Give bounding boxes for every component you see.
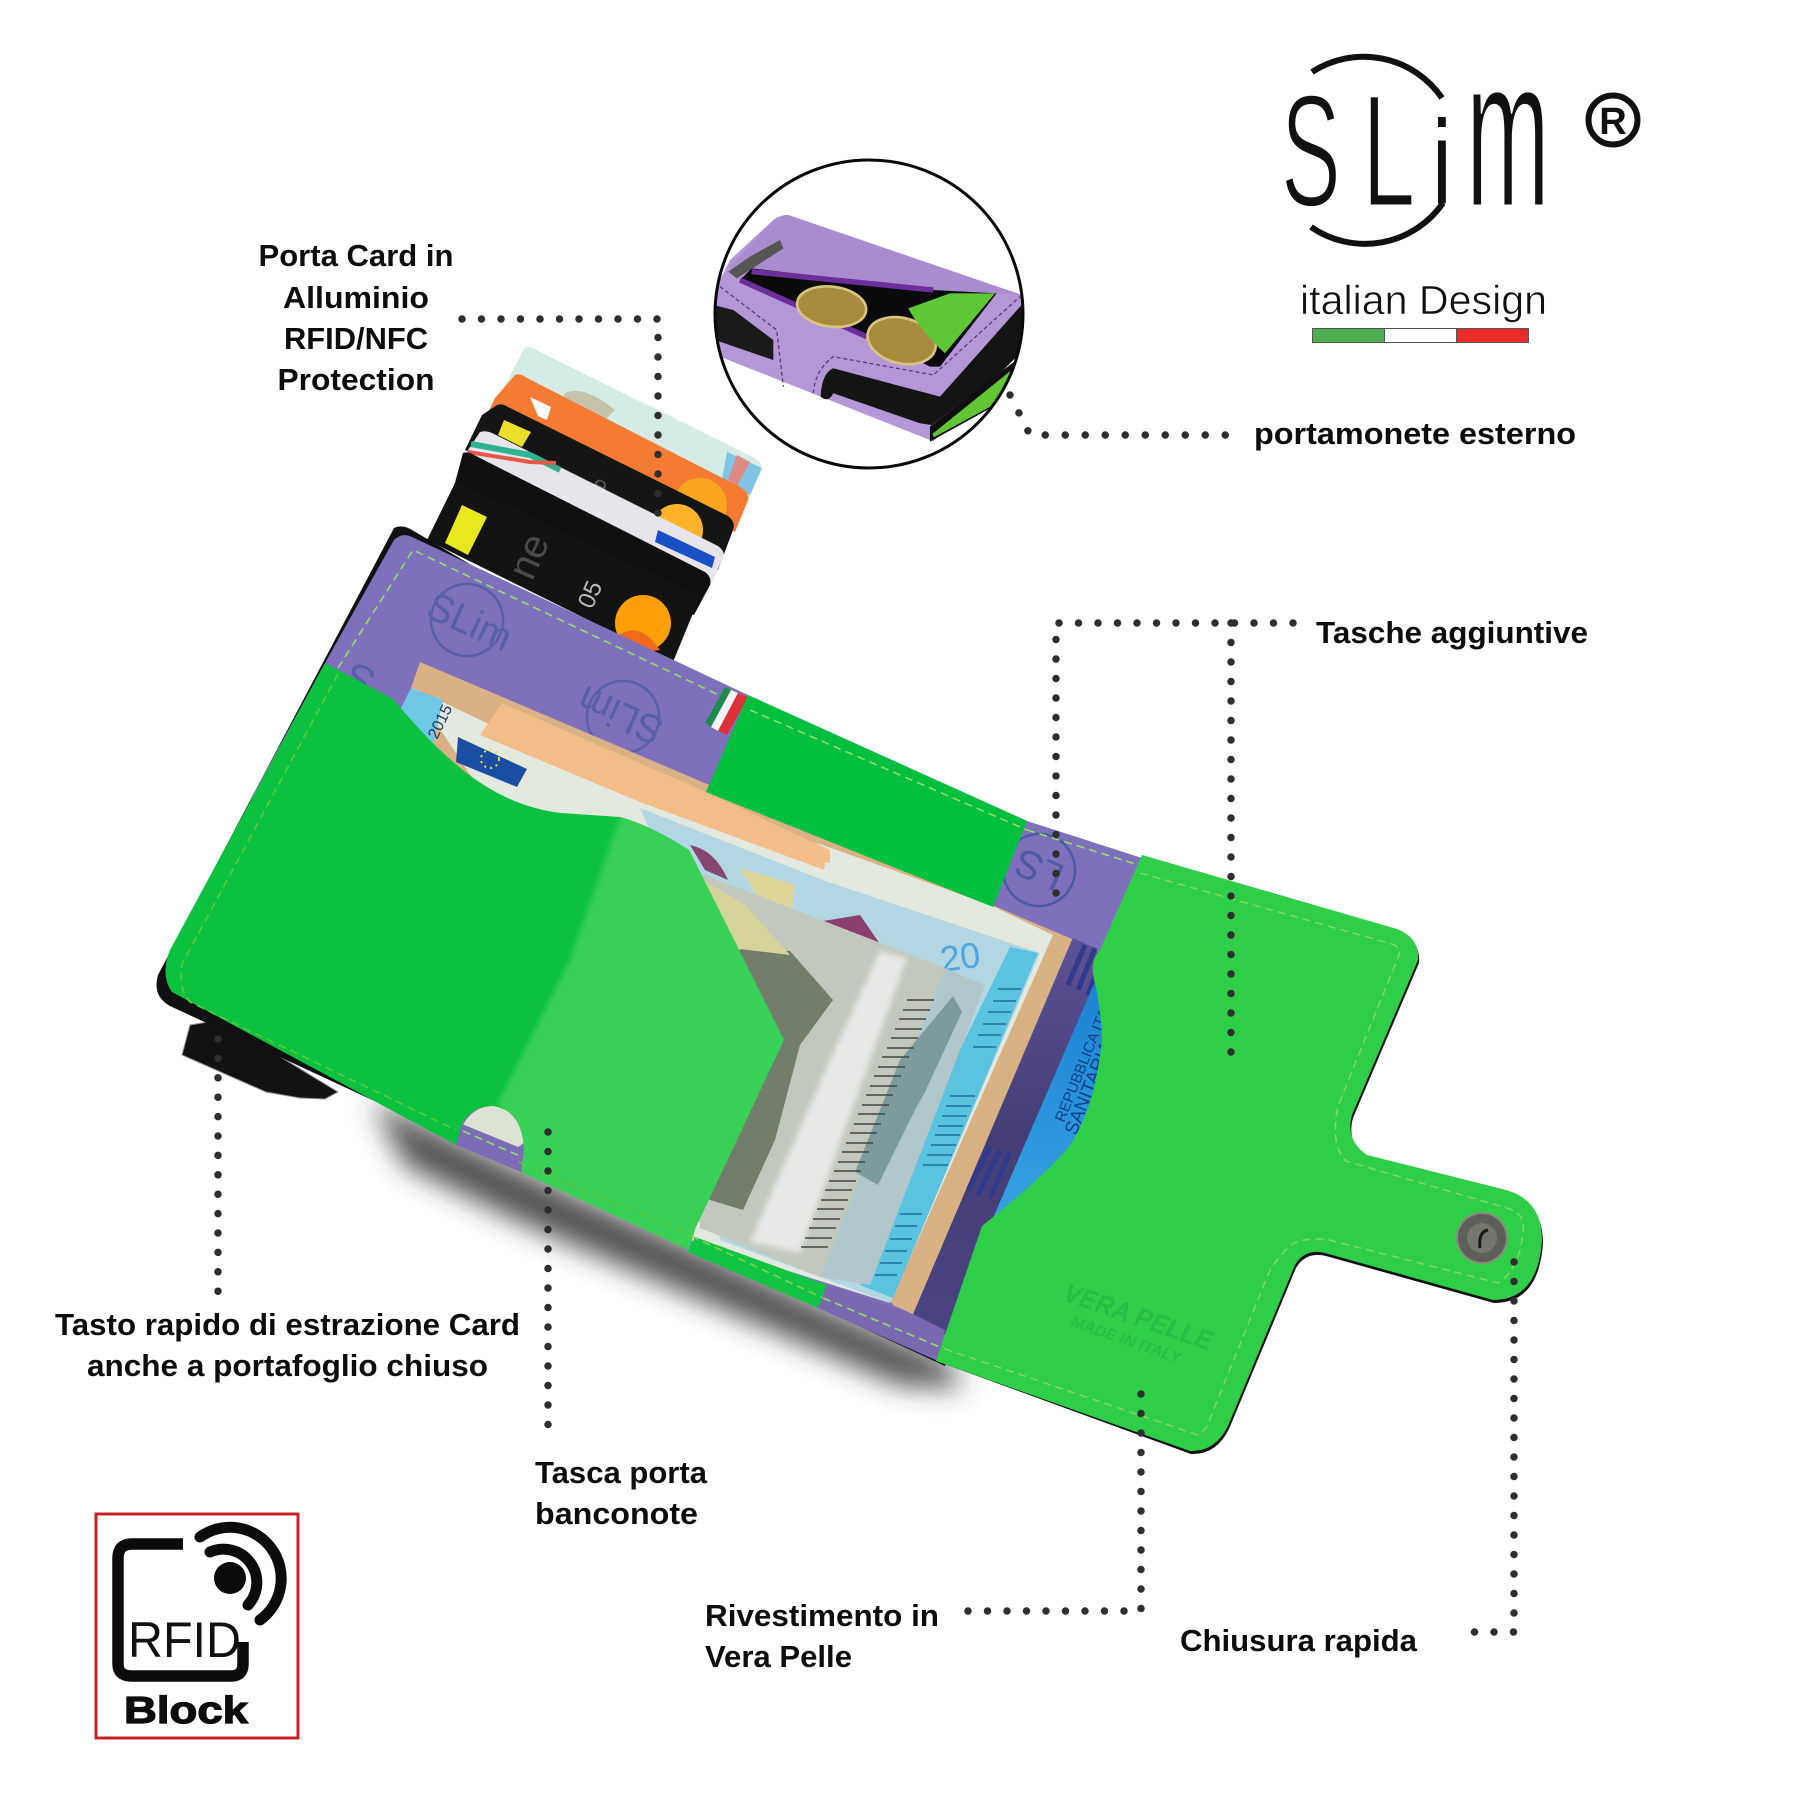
EU flag (456, 737, 527, 787)
label: tasto rapido (55, 1307, 520, 1383)
grey note (680, 874, 945, 1277)
tan lining edge front (893, 935, 1072, 1314)
health card peeking, blue: SANITARIA (1061, 1038, 1118, 1138)
logo wordmark: i (1432, 97, 1452, 229)
health card peeking, blue (993, 900, 1170, 1260)
embossed Vera Pelle mark: VERA PELLE (1060, 1277, 1217, 1356)
cyan right stripe (860, 947, 1038, 1298)
lining stamp bars (968, 945, 1105, 1198)
card: black two (445, 452, 710, 615)
magenta window (823, 915, 880, 944)
icon: signal dot (214, 1562, 246, 1594)
lining stamp top-left: SLim (420, 584, 518, 660)
wallet close-up (710, 215, 1027, 442)
magenta arch (690, 845, 728, 880)
label: tasto rapido: anche a portafoglio chiuso (87, 1348, 488, 1383)
tagline: italian Design (1300, 277, 1547, 323)
pale cream top strip (823, 862, 1053, 953)
left green banknote pocket (Tasca porta banconote) (165, 663, 800, 1260)
pocket stitching (181, 674, 691, 1236)
light blue note (640, 808, 1040, 1303)
banknotes (395, 662, 1072, 1314)
leader: tasto rapido (214, 1039, 222, 1293)
bottom purple strip (818, 1285, 945, 1361)
leader: rivestimento (964, 1394, 1141, 1611)
drop shadow under wallet (372, 1100, 965, 1388)
card: ID light (495, 347, 762, 500)
leader: chiusura rapida (1457, 1262, 1514, 1632)
tan note edge (400, 662, 1072, 1314)
health card peeking, blue: REPUBBLICA ITALIANA (1052, 966, 1129, 1124)
label: tasca porta banconote (535, 1455, 708, 1531)
orange note strip (480, 703, 830, 872)
hologram dark arch (855, 996, 962, 1185)
logo ring (1311, 57, 1443, 244)
card: black front with orange circle: 05 (573, 577, 608, 612)
logo wordmark: m (1466, 14, 1550, 252)
bottom strip stitching (691, 1236, 823, 1298)
black wallet body (156, 526, 950, 1366)
leader: tasca banconote (544, 1132, 552, 1426)
label: tasche aggiuntive: Tasche aggiuntive (1316, 615, 1588, 650)
label: tasca porta banconote: banconote (535, 1496, 698, 1531)
label: rivestimento: Rivestimento in (705, 1598, 939, 1633)
bottom green strip under notes (688, 1237, 827, 1308)
icon: card outline (118, 1544, 243, 1676)
leader: porta card (462, 319, 658, 515)
2015 date: 2015 (425, 702, 456, 742)
card: black front with orange circle (427, 483, 697, 662)
lighter folded flap (498, 812, 800, 1260)
bottom purple stitching (823, 1298, 942, 1348)
yellow star patch (740, 868, 795, 925)
leader: portamonete (1010, 395, 1230, 435)
logo wordmark: S (1281, 63, 1341, 241)
registered mark (1588, 96, 1638, 144)
circle outline (715, 160, 1023, 468)
RFID text: RFID (128, 1612, 241, 1668)
yellow building highlight (703, 880, 790, 955)
dark purple shaded lining (913, 938, 1120, 1335)
label: portamonete esterno: portamonete esterno (1254, 416, 1576, 451)
blue patch and 2015 (395, 688, 443, 750)
label: rivestimento (705, 1598, 939, 1674)
right green closure flap (Rivestimento in Vera Pelle) (936, 855, 1542, 1451)
card: orange (480, 374, 748, 532)
label: porta card: Alluminio (283, 280, 429, 315)
snap button (1457, 1213, 1507, 1263)
leader: tasche second branch (1227, 623, 1235, 1054)
flap stitching (942, 873, 1523, 1435)
quick release button (182, 1020, 338, 1099)
logo wordmark (1281, 14, 1550, 252)
label: porta card: Protection (278, 362, 434, 397)
lining stamp middle: SLim (572, 677, 670, 753)
label: tasca porta banconote: Tasca porta (535, 1455, 708, 1490)
label: porta card (258, 238, 454, 397)
cream note (413, 688, 1053, 1303)
cards fanned out of aluminium holder (427, 347, 762, 662)
label: rivestimento: Vera Pelle (705, 1639, 852, 1674)
logo wordmark: L (1362, 62, 1415, 240)
badge: RFID Block (96, 1514, 298, 1738)
upper green pocket band (706, 695, 1027, 907)
inner purple lining (250, 535, 1200, 1365)
upper band stitching (750, 710, 1027, 830)
label: tasto rapido: Tasto rapido di estrazione Card (55, 1307, 520, 1342)
label: porta card: RFID/NFC (284, 321, 428, 356)
card: black one: e (587, 468, 613, 502)
inset circle: external coin pocket (710, 160, 1027, 468)
card: black front with orange circle: ne (500, 527, 558, 586)
lining stitching (338, 550, 1142, 866)
registered mark: R (1599, 101, 1627, 143)
blue hatch lines (875, 989, 1021, 1275)
black hatch lines (801, 1000, 934, 1247)
lining stamp right (991, 822, 1087, 918)
label: chiusura rapida: Chiusura rapida (1180, 1623, 1418, 1658)
white watermark streak (750, 951, 907, 1253)
tricolor tag (705, 687, 748, 735)
grey architecture on note (690, 949, 833, 1210)
value 20: 20 (937, 934, 983, 980)
card: white (455, 431, 724, 590)
lining stamp fragment left: S (339, 653, 382, 704)
silver band on grey note (820, 968, 985, 1285)
icon: signal waves (200, 1527, 281, 1620)
italian flag bar (1312, 328, 1528, 342)
label: porta card: Porta Card in (258, 238, 454, 273)
thumb notch in pocket (454, 1106, 525, 1172)
logo: SLIM italian Design (1281, 14, 1638, 342)
Block text: Block (124, 1690, 249, 1732)
right flap black edge (939, 861, 1543, 1454)
embossed Vera Pelle mark: MADE IN ITALY (1069, 1314, 1184, 1368)
lining stamp right: LS (1008, 839, 1071, 899)
card: black one (465, 404, 734, 570)
leader: tasche aggiuntive (1056, 623, 1296, 893)
badge frame (96, 1514, 298, 1738)
